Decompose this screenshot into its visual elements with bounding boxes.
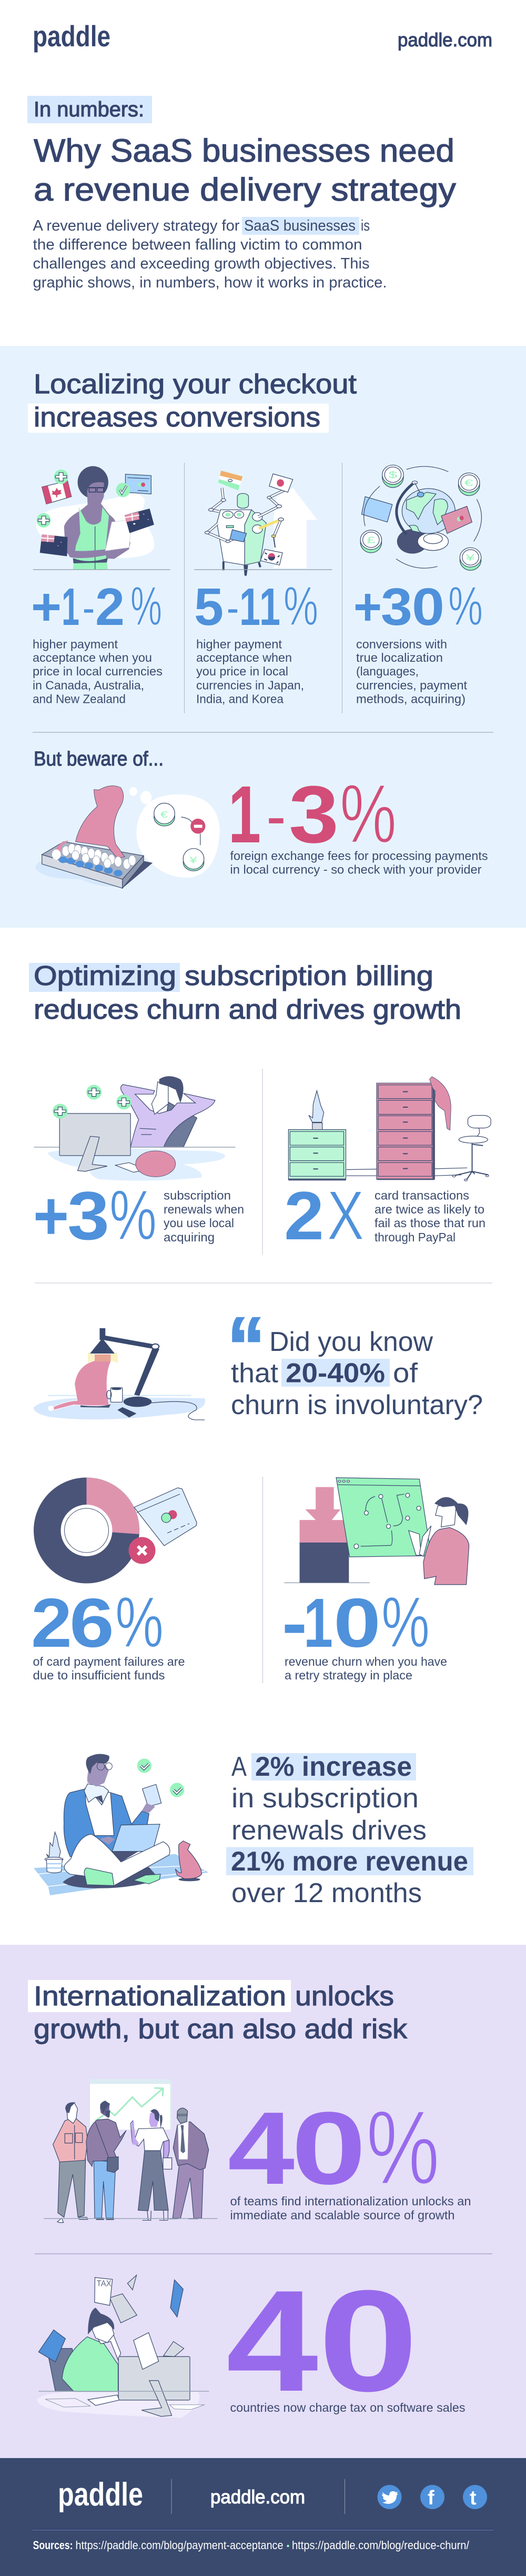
stat: -10% — [282, 1582, 430, 1662]
stat description: subscription — [164, 1189, 231, 1202]
illustration: robot holding flags — [194, 471, 332, 575]
stat description: acquiring — [164, 1230, 215, 1244]
stat description: currencies, payment — [356, 678, 468, 692]
stat: 1-3%: - — [266, 769, 287, 860]
stat: +30%: + — [353, 578, 382, 636]
intro paragraph: graphic shows, in numbers, how it works in practice. — [33, 274, 387, 291]
stat: +30%: 3 — [381, 578, 412, 636]
intro paragraph: is — [361, 217, 370, 234]
panel: internationalization — [0, 1945, 526, 2458]
stat description: methods, acquiring) — [356, 692, 466, 705]
stat description: of teams find internationalization unlocks an — [230, 2194, 471, 2208]
illustration: retry strategy screen and person — [284, 1478, 469, 1585]
sources — [33, 2539, 470, 2552]
hanging cat — [430, 1077, 451, 1130]
stat: +1-2%: 1 — [62, 578, 79, 636]
plant pot — [45, 1832, 63, 1873]
footer — [0, 2458, 526, 2576]
icon: yen coin — [460, 548, 481, 570]
intro paragraph: SaaS businesses — [244, 217, 356, 234]
icon: plus badge — [54, 470, 68, 484]
stat: -10%: - — [282, 1584, 307, 1662]
icon: robot card — [230, 530, 247, 542]
stat: 40%: 4 — [228, 2091, 295, 2206]
callout: 2% increase: 2% increase — [255, 1752, 412, 1782]
stat: 26%: 2 — [31, 1584, 72, 1662]
stat: 5-11%: 1 — [259, 578, 280, 636]
stat: +3%: % — [109, 1176, 157, 1255]
stat description: currencies in Japan, — [196, 678, 304, 692]
icon: euro coin: € — [160, 809, 168, 820]
section heading: subscription billing — [185, 961, 433, 991]
callout: Did you know: churn is involuntary? — [231, 1390, 483, 1420]
illustration: globe with currencies — [360, 465, 481, 570]
illustration: man with laptop and cat — [34, 1754, 209, 1895]
tall pink cabinet — [377, 1083, 435, 1180]
icon: plus badge — [37, 513, 50, 528]
stat: +3%: + — [33, 1177, 69, 1254]
stat description — [196, 637, 304, 705]
person in pink — [409, 1497, 469, 1585]
title: Why SaaS businesses need — [34, 133, 454, 168]
stat: 40% — [228, 2089, 440, 2206]
icon: twitter — [378, 2485, 402, 2509]
website link: paddle.com — [398, 29, 492, 51]
stat: +30% — [353, 576, 483, 637]
growth chart board — [90, 2079, 171, 2130]
stat description — [285, 1655, 447, 1682]
icon: dollar coin: $ — [388, 470, 398, 480]
stat description: of card payment failures are — [33, 1655, 185, 1668]
intro paragraph: the difference between falling victim to common — [33, 236, 362, 253]
stat: 26%: % — [115, 1582, 164, 1662]
desk lamp — [90, 1328, 159, 1407]
stat description: you use local — [164, 1216, 234, 1230]
chart: donut with failed card — [34, 1477, 197, 1584]
stat: 2X — [284, 1177, 364, 1254]
callout: Did you know — [227, 1300, 483, 1420]
icon: yen coin: ¥ — [189, 854, 197, 865]
illustration: relaxing person at desk with cat — [34, 1076, 235, 1181]
title block — [27, 96, 457, 291]
icon: blue wallet — [361, 496, 392, 522]
arrows: currency cycle — [364, 466, 481, 568]
abacus beads — [59, 857, 123, 877]
stat: -10%: % — [381, 1582, 430, 1662]
stat: 40: 4 — [226, 2261, 319, 2422]
callout: 2% increase: A — [231, 1752, 247, 1782]
icon: minus badge — [190, 819, 205, 834]
stat description — [356, 637, 468, 705]
icon: pound coin — [360, 530, 382, 553]
icon: yen coin: ¥ — [465, 552, 475, 563]
stat: +3% — [33, 1176, 157, 1255]
tax sheet: TAX — [97, 2279, 112, 2288]
icon: euro coin — [154, 803, 175, 826]
section heading: increases conversions — [34, 402, 320, 433]
icon: Canadian flag — [42, 481, 72, 504]
stat: 1-3%: 3 — [289, 769, 339, 860]
stat description: price in local currencies — [33, 664, 163, 678]
sources: https://paddle.com/blog/reduce-churn/ — [292, 2539, 470, 2552]
person: pink shirt — [53, 2102, 88, 2223]
flying papers — [38, 2275, 184, 2370]
callout: Did you know: of — [393, 1358, 418, 1389]
kicker: In numbers: In numbers: — [34, 98, 144, 121]
stat: 1-3% — [228, 768, 397, 860]
stat: +1-2%: 2 — [95, 578, 125, 636]
stat: 2X: 2 — [284, 1177, 324, 1254]
section heading: unlocks — [295, 1981, 394, 2012]
icon: Australian flag — [125, 509, 154, 533]
panel: localizing your checkout — [0, 346, 526, 928]
stat description: are twice as likely to — [375, 1202, 484, 1216]
section heading — [28, 369, 357, 433]
stat: 5-11%: 5 — [194, 578, 224, 636]
panel: optimizing subscription billing — [29, 961, 492, 1908]
stat: 5-11%: % — [284, 576, 318, 637]
callout: Did you know: that — [231, 1358, 279, 1389]
stat description: fail as those that run — [375, 1216, 485, 1230]
stat: 40%: 0 — [291, 2091, 366, 2206]
stat: 5-11% — [194, 576, 318, 637]
stat: +3%: 3 — [67, 1177, 109, 1254]
icon: yen coin — [183, 849, 204, 871]
icon: error badge — [128, 1537, 156, 1564]
stat description: acceptance when you — [33, 651, 152, 664]
icon: check badge — [116, 483, 130, 497]
sources: Sources: — [33, 2539, 73, 2552]
callout: 2% increase: 21% more revenue — [231, 1846, 468, 1877]
stat: 2X: X — [327, 1177, 364, 1254]
callout: 2% increase: over 12 months — [231, 1878, 422, 1908]
icon: flag of Japan — [269, 474, 293, 492]
stat description: renewals when — [164, 1202, 244, 1216]
stat description: due to insufficient funds — [33, 1668, 165, 1682]
stat: 1-3%: % — [340, 768, 397, 860]
website link: paddle.com — [210, 2486, 305, 2508]
socks — [84, 1868, 114, 1886]
icon: credit card — [125, 474, 151, 494]
icon: euro coin — [458, 473, 480, 495]
logo: paddle: paddle — [33, 19, 110, 53]
section heading — [29, 961, 461, 1025]
person: grey suit and tie — [169, 2108, 209, 2219]
subheading: But beware of: But beware of... — [34, 748, 164, 770]
illustration: team with growth chart — [44, 2079, 217, 2223]
sources: https://paddle.com/blog/payment-acceptance — [76, 2539, 283, 2552]
stat: 1-3%: 1 — [228, 769, 261, 860]
icon: facebook: f — [428, 2487, 434, 2509]
intro paragraph: challenges and exceeding growth objectives. This — [33, 255, 369, 272]
illustration: filing cabinets with cat and chair — [288, 1077, 491, 1181]
stat: 26% — [31, 1582, 164, 1662]
icon: pound coin: £ — [367, 535, 376, 545]
callout: 2% increase: renewals drives — [231, 1815, 427, 1846]
callout: 2% increase — [226, 1752, 473, 1908]
icon: tumblr: t — [470, 2487, 477, 2509]
section heading: Optimizing — [34, 961, 176, 991]
icon: New Zealand flag — [40, 534, 67, 556]
stat: +1-2%: - — [82, 578, 95, 636]
stat: +1-2%: % — [130, 576, 162, 637]
stat description: through PayPal — [375, 1230, 456, 1244]
stat description — [33, 1655, 185, 1682]
callout: Did you know: Did you know — [269, 1327, 433, 1357]
icon: flag of Korea — [260, 549, 282, 565]
section heading: reduces churn and drives growth — [34, 994, 461, 1025]
stat: -10%: 1 — [304, 1584, 333, 1662]
logo: paddle: paddle — [58, 2476, 143, 2513]
callout: Did you know: 20-40% — [286, 1358, 385, 1389]
illustration: woman with flags and tablet — [33, 466, 170, 570]
title: a revenue delivery strategy — [34, 172, 457, 207]
stat description: acceptance when — [196, 651, 292, 664]
stat: +30%: 0 — [412, 578, 444, 636]
illustration: stressed woman with tax papers — [37, 2275, 209, 2418]
stat description: conversions with — [356, 637, 447, 651]
icon: euro coin: € — [464, 478, 473, 488]
stat description — [164, 1189, 244, 1244]
stat: 40: 0 — [318, 2261, 418, 2422]
office chair — [452, 1116, 491, 1181]
stat description: higher payment — [33, 637, 118, 651]
section heading: Internationalization — [34, 1981, 286, 2012]
section heading: Localizing your checkout — [34, 369, 357, 400]
section heading: growth, but can also add risk — [34, 2014, 408, 2045]
section heading — [28, 1980, 408, 2045]
icon: quote mark: “ — [227, 1300, 265, 1393]
stat: 40 — [226, 2261, 418, 2422]
icon: flag of India — [218, 471, 242, 491]
stat: 5-11%: - — [226, 578, 239, 636]
stat: 40%: % — [366, 2089, 440, 2206]
person: white shirt and trousers — [130, 2109, 172, 2220]
stat description: in Canada, Australia, — [33, 678, 144, 692]
stat description: card transactions — [375, 1189, 469, 1202]
icon: sleeping cat — [136, 1151, 176, 1177]
icon: facebook — [420, 2485, 444, 2509]
stat description: revenue churn when you have — [285, 1655, 447, 1668]
small green cabinet — [288, 1130, 346, 1180]
icon: pink card — [441, 506, 472, 533]
icon: tumblr — [463, 2485, 487, 2509]
stat description: and New Zealand — [33, 692, 126, 705]
plant — [309, 1091, 324, 1130]
stat description: you price in local — [196, 664, 288, 678]
person: purple jacket with bag — [86, 2101, 126, 2220]
mug — [107, 1388, 123, 1402]
intro paragraph — [33, 217, 387, 291]
illustration: cat on abacus with thought bubble — [35, 785, 220, 888]
stat description — [230, 2194, 471, 2222]
stat: +1-2% — [31, 576, 162, 637]
stat: +1-2%: + — [31, 578, 62, 636]
stat description: countries now charge tax on software sales — [230, 2401, 465, 2414]
check badges — [137, 1758, 184, 1797]
header — [33, 19, 492, 53]
phone — [117, 1407, 137, 1417]
stat: -10%: 0 — [333, 1584, 381, 1662]
stat description — [375, 1189, 485, 1244]
illustration: cat under lamp — [34, 1328, 205, 1420]
intro paragraph: A revenue delivery strategy for — [33, 217, 240, 234]
cat — [175, 1841, 201, 1881]
stat description: a retry strategy in place — [285, 1668, 412, 1682]
icon: plus badges — [53, 1085, 132, 1119]
stat: 5-11%: 1 — [239, 578, 260, 636]
stat description — [230, 849, 488, 876]
tax sheet — [95, 2277, 113, 2305]
stat description: India, and Korea — [196, 692, 284, 705]
legs — [64, 1834, 170, 1886]
stat description — [33, 637, 163, 705]
title — [34, 133, 457, 207]
stat description: true localization — [356, 651, 443, 664]
icon: dollar coin — [382, 465, 403, 488]
stat description: immediate and scalable source of growth — [230, 2208, 454, 2222]
stat description: higher payment — [196, 637, 282, 651]
callout: 2% increase: in subscription — [231, 1783, 419, 1814]
stat: 26%: 6 — [69, 1584, 114, 1662]
stat description: (languages, — [356, 664, 419, 678]
stat description: foreign exchange fees for processing payments — [230, 849, 488, 862]
stat description: in local currency - so check with your provider — [230, 862, 482, 876]
stat: +30%: % — [448, 576, 483, 637]
